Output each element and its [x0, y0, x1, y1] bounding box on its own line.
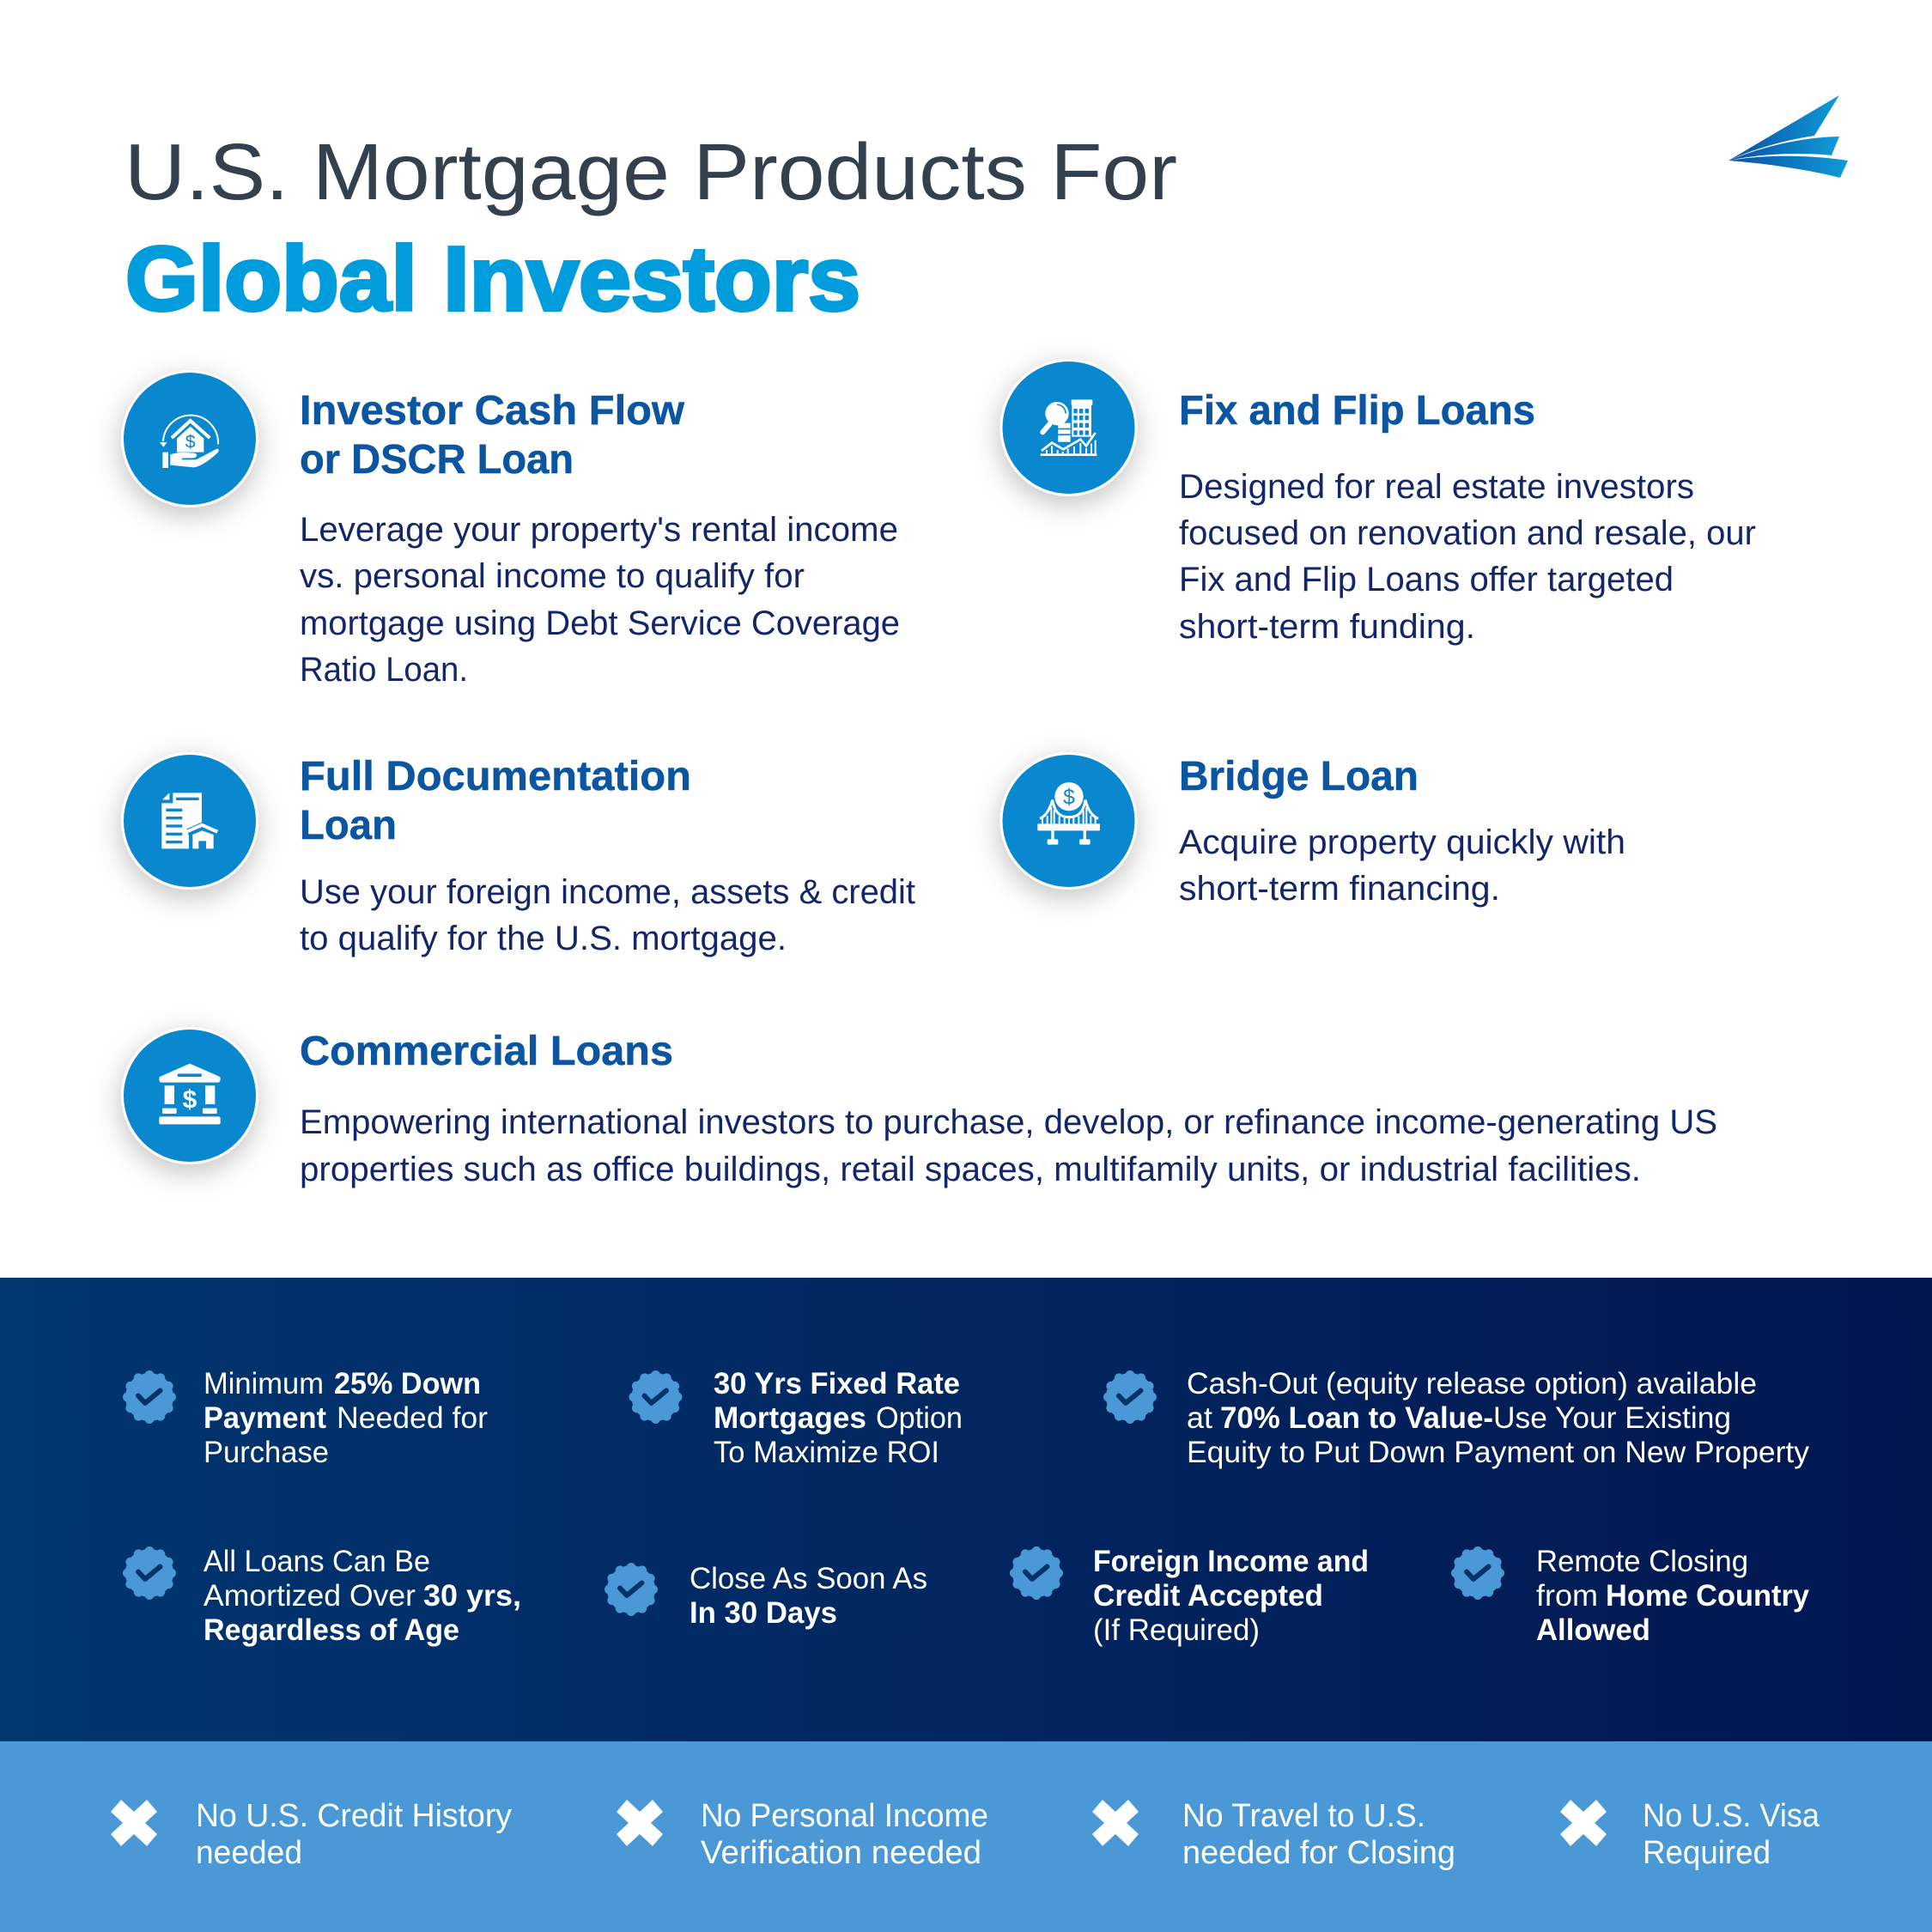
heading	[300, 388, 685, 483]
feature text: Needed for	[337, 1401, 488, 1435]
description: Empowering international investors to purchase, develop, or refinance income-generating US	[300, 1103, 1717, 1141]
heading: Commercial Loans	[300, 1029, 673, 1074]
description: to qualify for the U.S. mortgage.	[300, 920, 787, 957]
item text: needed	[196, 1835, 302, 1871]
feature text: from	[1536, 1579, 1598, 1613]
panel: investor cash flow loan	[121, 370, 900, 689]
feature text: Remote Closing	[1536, 1545, 1748, 1578]
icon: bridge and dollar coin: $	[1063, 786, 1075, 809]
title	[125, 127, 1177, 330]
feature text	[1093, 1545, 1369, 1647]
item text: Verification needed	[701, 1835, 981, 1871]
item: no income verification	[617, 1798, 988, 1871]
panel: not required band	[0, 1741, 1932, 1932]
description: Acquire property quickly with	[1179, 823, 1625, 861]
logo	[1728, 95, 1848, 178]
icon: check badge	[1103, 1370, 1157, 1424]
item text	[701, 1798, 988, 1871]
description	[300, 1103, 1717, 1188]
feature: amortized over 30 years	[123, 1545, 521, 1647]
description: Designed for real estate investors	[1179, 468, 1694, 506]
feature: cash-out	[1103, 1367, 1809, 1469]
panel: full documentation loan	[121, 752, 915, 957]
feature text: Allowed	[1536, 1613, 1650, 1647]
title line 2: Global Investors	[125, 228, 860, 330]
description: Leverage your property's rental income	[300, 511, 898, 549]
icon: cross	[111, 1800, 157, 1846]
description: focused on renovation and resale, our	[1179, 514, 1756, 552]
description: Fix and Flip Loans offer targeted	[1179, 561, 1674, 598]
description: mortgage using Debt Service Coverage	[300, 605, 900, 642]
description	[300, 511, 900, 689]
icon: cross	[1560, 1800, 1607, 1846]
feature text	[690, 1562, 927, 1630]
description	[300, 873, 915, 957]
feature text: (If Required)	[1093, 1613, 1260, 1647]
item text	[1182, 1798, 1455, 1871]
item text: No U.S. Visa	[1643, 1798, 1820, 1834]
feature text: 70% Loan to Value-	[1220, 1401, 1493, 1435]
feature text: Home Country	[1606, 1579, 1810, 1613]
item text: No U.S. Credit History	[196, 1798, 512, 1834]
feature: remote closing	[1451, 1545, 1810, 1647]
feature text: Foreign Income and	[1093, 1545, 1369, 1578]
feature text: Minimum	[204, 1367, 324, 1400]
feature text: Equity to Put Down Payment on New Property	[1187, 1436, 1809, 1469]
icon: check badge	[605, 1563, 658, 1616]
feature text: Cash-Out (equity release option) available	[1187, 1367, 1757, 1400]
icon: house in hand: $	[185, 432, 196, 453]
feature text: Use Your Existing	[1493, 1401, 1731, 1435]
feature text: Amortized Over	[204, 1579, 416, 1613]
icon: cross	[617, 1800, 663, 1846]
icon: check badge	[123, 1546, 176, 1600]
icon: building, magnifier and chart	[999, 359, 1137, 496]
panel: commercial loans	[121, 1027, 1717, 1188]
feature text: Regardless of Age	[204, 1613, 459, 1647]
feature text	[1187, 1367, 1809, 1469]
description	[1179, 468, 1756, 646]
heading: Loan	[300, 803, 397, 848]
icon: bridge and dollar coin	[999, 752, 1137, 890]
feature text: Mortgages	[714, 1401, 866, 1435]
heading: or DSCR Loan	[300, 437, 574, 483]
description: short-term financing.	[1179, 870, 1500, 908]
icon: check badge	[123, 1370, 176, 1424]
feature: close in 30 days	[605, 1562, 927, 1630]
feature text	[204, 1367, 488, 1469]
title line 1: U.S. Mortgage Products For	[125, 127, 1177, 216]
feature: foreign income accepted	[1010, 1545, 1369, 1647]
heading: Fix and Flip Loans	[1179, 388, 1535, 434]
feature: 30 year fixed rate	[629, 1367, 963, 1469]
feature text: Option	[876, 1401, 963, 1435]
feature text: In 30 Days	[690, 1596, 837, 1630]
description: Ratio Loan.	[300, 651, 468, 689]
icon: check badge	[1010, 1546, 1063, 1600]
item text: needed for Closing	[1182, 1835, 1455, 1871]
item: no visa	[1560, 1798, 1820, 1871]
heading	[300, 754, 691, 848]
item text: No Personal Income	[701, 1798, 988, 1834]
feature text: Purchase	[204, 1436, 329, 1469]
feature text: 30 yrs,	[423, 1579, 521, 1613]
icon: bank building	[121, 1027, 258, 1164]
description: short-term funding.	[1179, 608, 1475, 646]
feature text: All Loans Can Be	[204, 1545, 430, 1578]
icon: check badge	[1451, 1546, 1504, 1600]
icon: bank building: $	[183, 1086, 197, 1115]
feature text: 30 Yrs Fixed Rate	[714, 1367, 960, 1400]
heading: Investor Cash Flow	[300, 388, 685, 434]
panel: loan features band	[0, 1278, 1932, 1741]
item text	[196, 1798, 512, 1871]
item: no credit history	[111, 1798, 512, 1871]
feature: minimum down payment	[123, 1367, 488, 1469]
feature text: 25% Down	[334, 1367, 481, 1400]
description: vs. personal income to qualify for	[300, 557, 805, 595]
icon: house in hand	[121, 370, 258, 507]
feature text	[204, 1545, 521, 1647]
description: Use your foreign income, assets & credit	[300, 873, 915, 911]
feature text: To Maximize ROI	[714, 1436, 939, 1469]
description: properties such as office buildings, retail spaces, multifamily units, or industrial facilities.	[300, 1151, 1641, 1188]
feature text	[1536, 1545, 1810, 1647]
item text: Required	[1643, 1835, 1771, 1871]
item text	[1643, 1798, 1820, 1871]
feature text: at	[1187, 1401, 1212, 1435]
panel: bridge loan	[999, 752, 1625, 908]
icon: check badge	[629, 1370, 682, 1424]
icon: document and house	[121, 752, 258, 890]
panel: fix and flip loans	[999, 359, 1756, 646]
feature text: Close As Soon As	[690, 1562, 927, 1595]
heading: Full Documentation	[300, 754, 691, 799]
item: no travel	[1092, 1798, 1455, 1871]
feature text	[714, 1367, 963, 1469]
feature text: Credit Accepted	[1093, 1579, 1323, 1613]
feature text: Payment	[204, 1401, 326, 1435]
description	[1179, 823, 1625, 908]
item text: No Travel to U.S.	[1182, 1798, 1425, 1834]
heading: Bridge Loan	[1179, 754, 1419, 799]
icon: cross	[1092, 1800, 1139, 1846]
